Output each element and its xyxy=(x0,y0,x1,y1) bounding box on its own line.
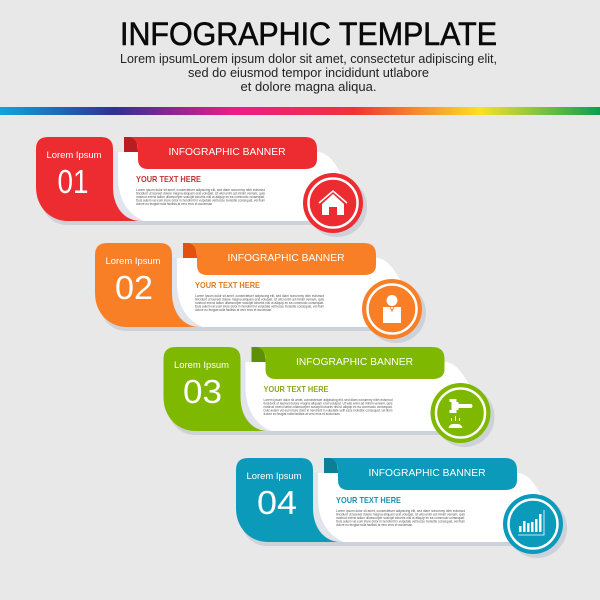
ribbon fold xyxy=(324,458,338,473)
number tab: 01 xyxy=(58,163,88,200)
banner heading: INFOGRAPHIC BANNER xyxy=(296,356,413,368)
banner heading xyxy=(189,243,376,275)
number tab xyxy=(164,347,268,431)
panel: banner 03 xyxy=(164,347,494,447)
text block: YOUR TEXT HERE xyxy=(264,384,329,394)
number tab: Lorem Ipsum xyxy=(106,256,161,267)
number tab: 04 xyxy=(257,484,297,521)
number tab: 03 xyxy=(183,373,222,410)
title: INFOGRAPHIC TEMPLATE xyxy=(120,16,497,52)
ribbon fold xyxy=(252,347,266,362)
number tab: Lorem Ipsum xyxy=(246,471,302,482)
text block: Duis autem vel eum iriure dolor in hendrerit in vulputate velit esse molestie consequat, vel illum xyxy=(336,520,465,524)
banner heading xyxy=(258,347,444,379)
number tab: Lorem Ipsum xyxy=(46,150,102,161)
text block: dolore eu feugiat nulla facilisis at vero eros et accumsan. xyxy=(195,308,272,312)
text block: nostrud exerci tation ullamcorper suscipit lobortis nisl ut aliquip ex ea commodo consequat. xyxy=(336,516,465,520)
panel: banner 01 xyxy=(36,137,367,237)
icon: gavel xyxy=(430,383,494,447)
text block xyxy=(136,174,265,206)
text block: nostrud exerci tation ullamcorper suscipit lobortis nisl ut aliquip ex ea commodo consequat. xyxy=(195,301,324,305)
banner heading: INFOGRAPHIC BANNER xyxy=(168,146,286,158)
text block: dolore eu feugiat nulla facilisis at vero eros et accumsan. xyxy=(136,202,213,206)
text block: YOUR TEXT HERE xyxy=(136,174,201,184)
icon: house xyxy=(303,173,367,237)
panel: banner 02 xyxy=(95,243,426,343)
text block: nostrud exerci tation ullamcorper suscipit lobortis nisl ut aliquip ex ea commodo consequat. xyxy=(136,195,265,199)
rainbow divider bar xyxy=(0,107,600,115)
text block xyxy=(264,384,393,416)
text block: Duis autem vel eum iriure dolor in hendrerit in vulputate velit esse molestie consequat, vel illum xyxy=(264,408,393,412)
subtitle: et dolore magna aliqua. xyxy=(240,80,376,94)
subtitle: sed do eiusmod tempor incididunt utlabore xyxy=(188,66,429,80)
text block: Lorem ipsum dolor sit amet, consectetuer adipiscing elit, sed diam nonummy nibh euismod xyxy=(195,294,324,298)
banner heading: INFOGRAPHIC BANNER xyxy=(228,252,345,264)
text block: tincidunt ut laoreet dolore magna aliquam erat volutpat. Ut wisi enim ad minim veniam, quis xyxy=(264,402,393,406)
icon: person xyxy=(362,279,426,343)
text block: dolore eu feugiat nulla facilisis at vero eros et accumsan. xyxy=(336,523,413,527)
text block xyxy=(195,280,324,312)
banner heading xyxy=(130,137,317,169)
number tab xyxy=(36,137,141,221)
icon: bar chart xyxy=(503,494,567,558)
ribbon fold xyxy=(183,243,197,258)
text block xyxy=(336,495,465,527)
text block: YOUR TEXT HERE xyxy=(195,280,260,290)
text block: Duis autem vel eum iriure dolor in hendrerit in vulputate velit esse molestie consequat, vel illum xyxy=(136,198,265,202)
text block: tincidunt ut laoreet dolore magna aliquam erat volutpat. Ut wisi enim ad minim veniam, quis xyxy=(336,512,465,516)
text block: nostrud exerci tation ullamcorper suscipit lobortis nisl ut aliquip ex ea commodo consequat. xyxy=(264,405,393,409)
text block: YOUR TEXT HERE xyxy=(336,495,401,505)
banner heading xyxy=(330,458,517,490)
banner heading: INFOGRAPHIC BANNER xyxy=(368,467,486,479)
subtitle xyxy=(120,52,497,94)
text block: Lorem ipsum dolor sit amet, consectetuer adipiscing elit, sed diam nonummy nibh euismod xyxy=(336,509,465,513)
text block: tincidunt ut laoreet dolore magna aliquam erat volutpat. Ut wisi enim ad minim veniam, quis xyxy=(136,192,265,196)
number tab xyxy=(236,458,341,542)
text block: Lorem ipsum dolor sit amet, consectetuer adipiscing elit, sed diam nonummy nibh euismod xyxy=(136,188,265,192)
panel: banner 04 xyxy=(236,458,567,558)
text block: dolore eu feugiat nulla facilisis at vero eros et accumsan. xyxy=(264,412,341,416)
ribbon fold xyxy=(124,137,138,152)
text block: Lorem ipsum dolor sit amet, consectetuer adipiscing elit, sed diam nonummy nibh euismod xyxy=(264,398,393,402)
number tab: Lorem Ipsum xyxy=(174,360,229,371)
text block: tincidunt ut laoreet dolore magna aliquam erat volutpat. Ut wisi enim ad minim veniam, quis xyxy=(195,298,324,302)
number tab xyxy=(95,243,200,327)
text block: Duis autem vel eum iriure dolor in hendrerit in vulputate velit esse molestie consequat, vel illum xyxy=(195,304,324,308)
subtitle: Lorem ipsumLorem ipsum dolor sit amet, consectetur adipiscing elit, xyxy=(120,52,497,66)
number tab: 02 xyxy=(115,269,153,306)
